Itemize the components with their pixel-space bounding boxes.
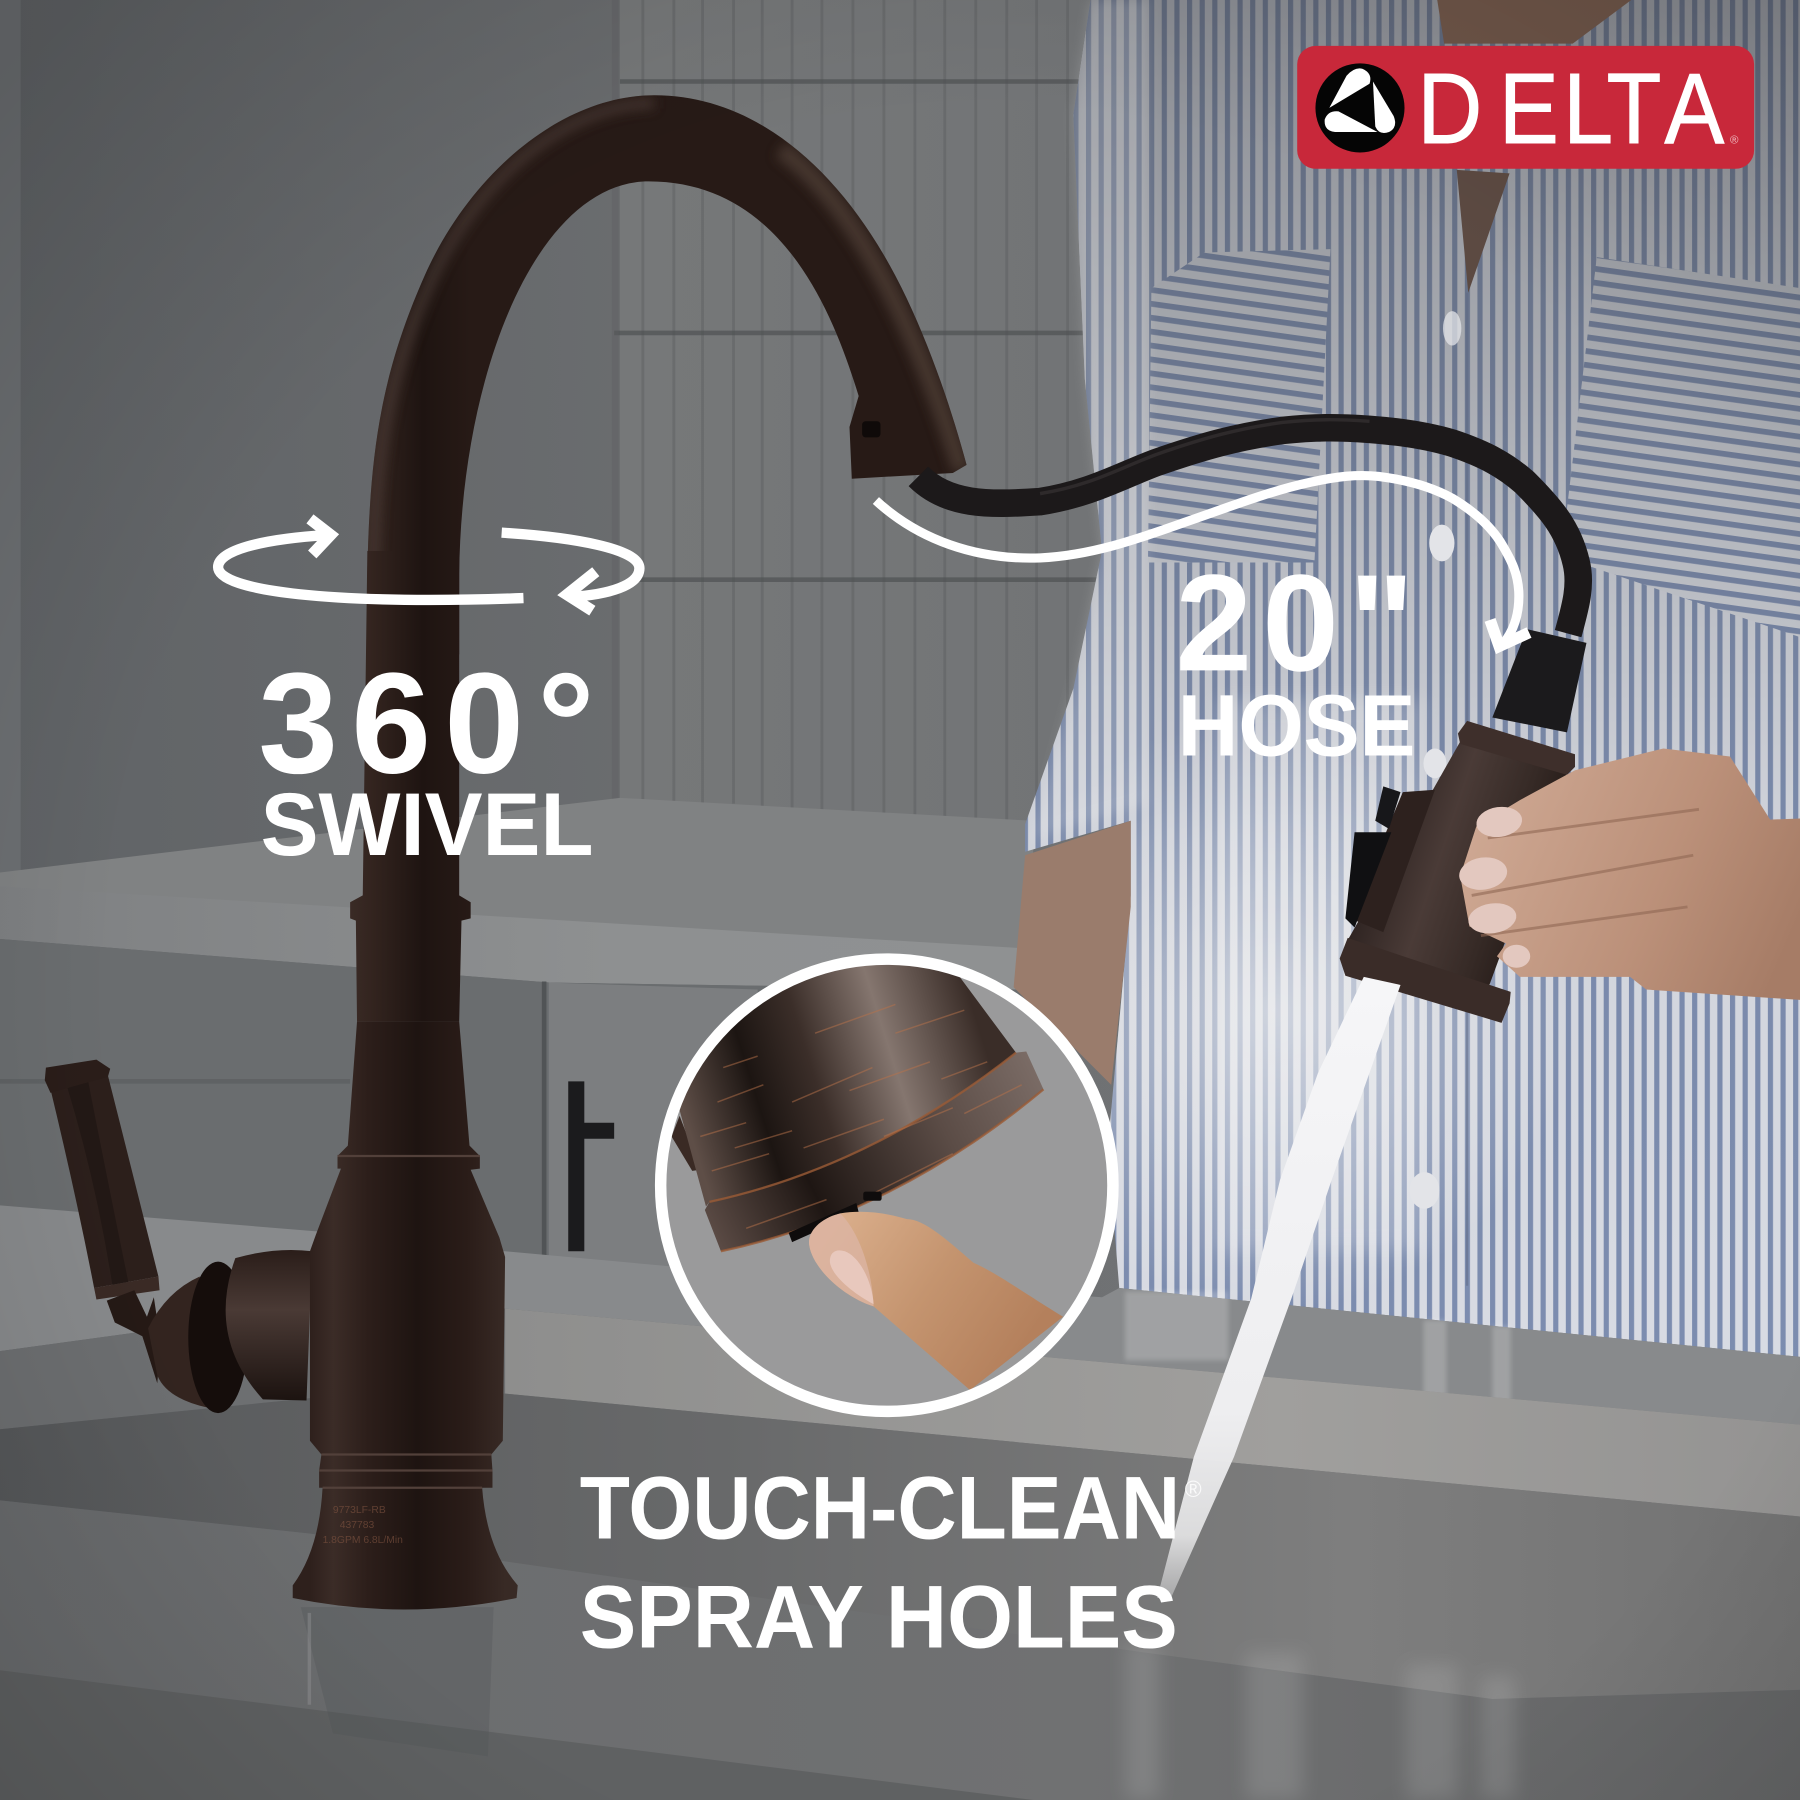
cabinet handle (576, 1081, 614, 1251)
background: back counter and cabinets (0, 798, 1033, 1320)
faucet: arched spout (367, 95, 967, 654)
callout: 360 degree swivel (258, 644, 595, 874)
neck skin (1437, 0, 1631, 293)
icon: swivel arrows (218, 519, 639, 611)
inset: spray head (666, 941, 1043, 1251)
faucet: body (293, 1022, 518, 1609)
pull-down hose (918, 420, 1578, 634)
pull-down spray head (1340, 629, 1586, 1023)
faucet: model engraving: 1.8GPM 6.8L/Min (323, 1535, 403, 1546)
faucet: lever handle (45, 1060, 161, 1383)
hand holding spray head (1457, 748, 1800, 1000)
callout: touch-clean spray holes (580, 1457, 1202, 1666)
callout: 20 inch hose: HOSE (1178, 677, 1415, 774)
faucet (45, 95, 967, 1609)
faucet: model engraving: 437783 (340, 1520, 375, 1531)
callout: 360 degree swivel: SWIVEL (261, 774, 593, 874)
water stream (1157, 977, 1401, 1598)
shirt pockets (1148, 249, 1800, 637)
shirt buttons (1410, 311, 1461, 1209)
faucet: stem and collar (350, 551, 471, 1022)
callout: touch-clean spray holes: ® (1185, 1476, 1202, 1502)
shirt (1025, 0, 1800, 1357)
arm (1014, 821, 1131, 1085)
callout: touch-clean spray holes: SPRAY HOLES (580, 1566, 1178, 1666)
sink counter and basin (0, 1205, 1800, 1800)
logo mark (1315, 63, 1405, 152)
icon: hose length arrow (876, 476, 1529, 646)
logo wordmark: DELTA (1417, 54, 1725, 165)
inset: fingertip (809, 1212, 1063, 1390)
fingernails (1457, 804, 1530, 968)
inset circle: touch-clean spray holes (661, 941, 1113, 1411)
logo: Delta: ® (1730, 134, 1739, 146)
callout: touch-clean spray holes: TOUCH-CLEAN (580, 1457, 1180, 1557)
callout: 20 inch hose (1176, 546, 1415, 774)
logo: Delta (1297, 46, 1754, 169)
faucet: side hub (148, 1250, 312, 1413)
callout: 20 inch hose: 20" (1176, 546, 1414, 700)
faucet: model engraving: 9773LF-RB (333, 1505, 386, 1516)
faucet: model engraving (323, 1505, 403, 1546)
callout: 360 degree swivel: 360° (258, 644, 595, 804)
sink reflections (1125, 1642, 1515, 1800)
